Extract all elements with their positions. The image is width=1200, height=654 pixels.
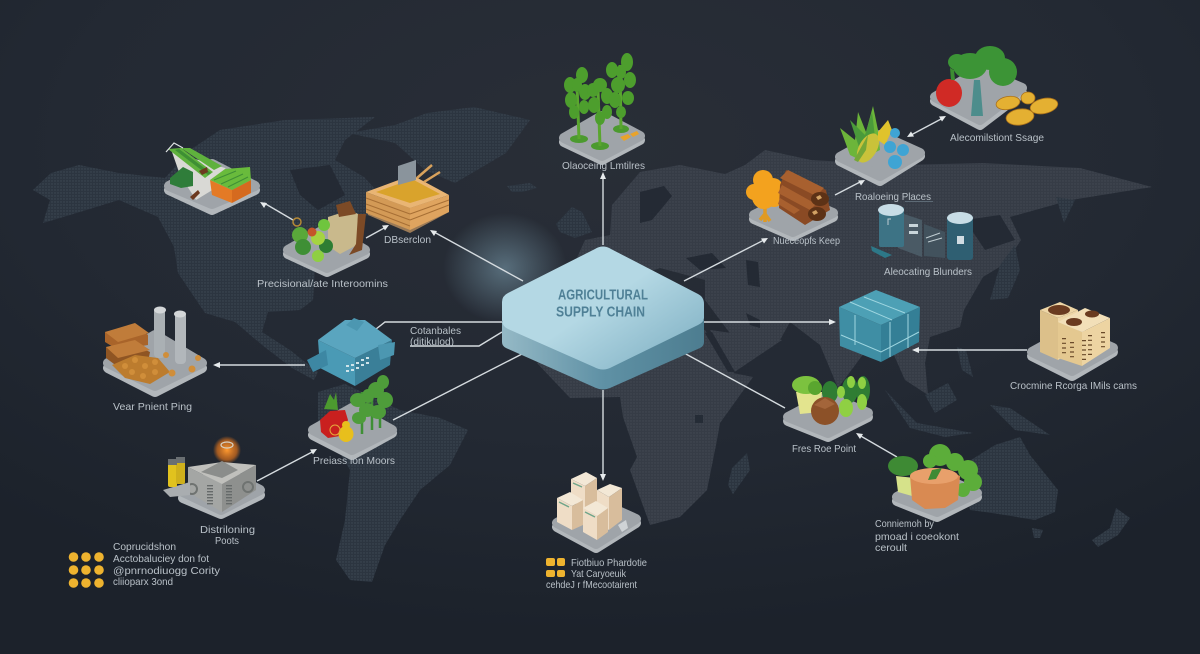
legend dots: [69, 552, 104, 588]
legend text: cliioparx 3ond: [113, 576, 173, 588]
connector lines: [213, 116, 1027, 481]
label: wood: Vear Pnient Ping: [113, 401, 192, 413]
label: bottom boxes: [546, 557, 647, 591]
node: bowl and greens: [888, 444, 982, 517]
label: bottom boxes: Yat Caryoeuik: [571, 568, 627, 580]
line to cube: [704, 321, 832, 323]
label: plants: Olaoceing Lmtilres: [562, 160, 645, 172]
label: bowl: ceroult: [875, 542, 907, 554]
world map: [33, 107, 1152, 582]
glow behind hub: [443, 213, 567, 323]
node: storage tanks: [871, 204, 973, 260]
node: crate: [366, 160, 449, 233]
label: distribution: Poots: [215, 535, 239, 547]
small arrow lines: [217, 118, 1027, 481]
eurasia: [575, 150, 1152, 395]
callout lines: [376, 322, 502, 346]
africa: [537, 322, 753, 525]
label: crate: DBserclon: [384, 234, 431, 246]
node: precision greens: [288, 201, 366, 272]
central hub: [502, 246, 704, 390]
line to logs: [684, 240, 764, 281]
line to crate: [434, 232, 523, 281]
bottom legend squares: [546, 558, 565, 577]
label: peppers: Preiass ion Moors: [313, 455, 395, 467]
great britain: [556, 207, 592, 238]
hub side: [502, 320, 704, 390]
label: tanks: Aleocating Blunders: [884, 266, 972, 278]
label: bowl: Conniemoh by: [875, 518, 935, 530]
label: corn: Roaloeing Places: [855, 191, 931, 203]
node: corn and blue figures: [840, 106, 920, 181]
new zealand: [1092, 508, 1130, 547]
small lake: [695, 415, 703, 423]
legend text: [113, 541, 221, 588]
label: distribution: Distriloning: [200, 524, 255, 536]
label: callout first line: Cotanbales: [410, 325, 461, 337]
label: callout second line: (ditikulod): [410, 336, 454, 348]
japan and kamchatka: [990, 197, 1075, 300]
label: logs: Nueceopfs Keep: [773, 235, 840, 247]
label: bowl: [875, 518, 959, 554]
legend text: Coprucidshon: [113, 541, 176, 553]
node: vegetable harvest: [166, 143, 255, 210]
arabia: [710, 330, 782, 373]
node: pepper, leaves and chips: [935, 46, 1059, 127]
node: tall boxes: [1032, 302, 1113, 376]
label: vegetables: Fres Roe Point: [792, 443, 856, 455]
legend text: Acctobaluciey don fot: [113, 553, 209, 565]
tasmania: [1032, 528, 1043, 538]
south america: [318, 384, 468, 582]
label: top right: Alecomilstiont Ssage: [950, 132, 1044, 144]
node: plants: [564, 53, 640, 160]
label: distribution: [200, 524, 255, 547]
line to plants: [602, 176, 604, 245]
label: bowl: pmoad i coeokont: [875, 531, 959, 543]
node: peppers and plants: [313, 375, 393, 455]
label: tall boxes: Crocmine Rcorga IMils cams: [1010, 380, 1137, 392]
node: distribution machine: [163, 436, 260, 514]
southeast asia islands: [885, 347, 1050, 437]
node: blue machine: [307, 318, 395, 386]
hub title: [556, 288, 648, 320]
labels: [113, 132, 1137, 591]
australia: [963, 437, 1058, 520]
madagascar: [728, 453, 750, 494]
line to peppers: [393, 354, 522, 420]
line to vegetables: [684, 353, 785, 408]
arrow heads: [213, 116, 946, 481]
underline under corn label: [905, 200, 933, 202]
greenland: [348, 107, 530, 183]
hub top: [502, 246, 704, 370]
node: teal cube: [839, 290, 920, 362]
node: trees and logs: [746, 170, 833, 236]
node: mixed vegetables: [788, 376, 870, 437]
label: precision interconnect: Precisional/ate Interoomins: [257, 278, 388, 290]
hub title: SUPPLY CHAIN: [556, 304, 645, 320]
line to boxes: [602, 390, 604, 476]
node: bottom boxes: [557, 472, 636, 548]
hub title: AGRICULTURAL: [558, 288, 648, 304]
iceland: [507, 183, 537, 192]
inland seas: [290, 165, 1015, 372]
label: bottom boxes: Fiotbiuo Phardotie: [571, 557, 647, 569]
legend text: @pnrnodiuogg Cority: [113, 565, 221, 577]
north america: [33, 117, 385, 380]
label: bottom boxes: cehdeJ r fMecootairent: [546, 579, 637, 591]
node: wood and pillars: [105, 306, 202, 392]
